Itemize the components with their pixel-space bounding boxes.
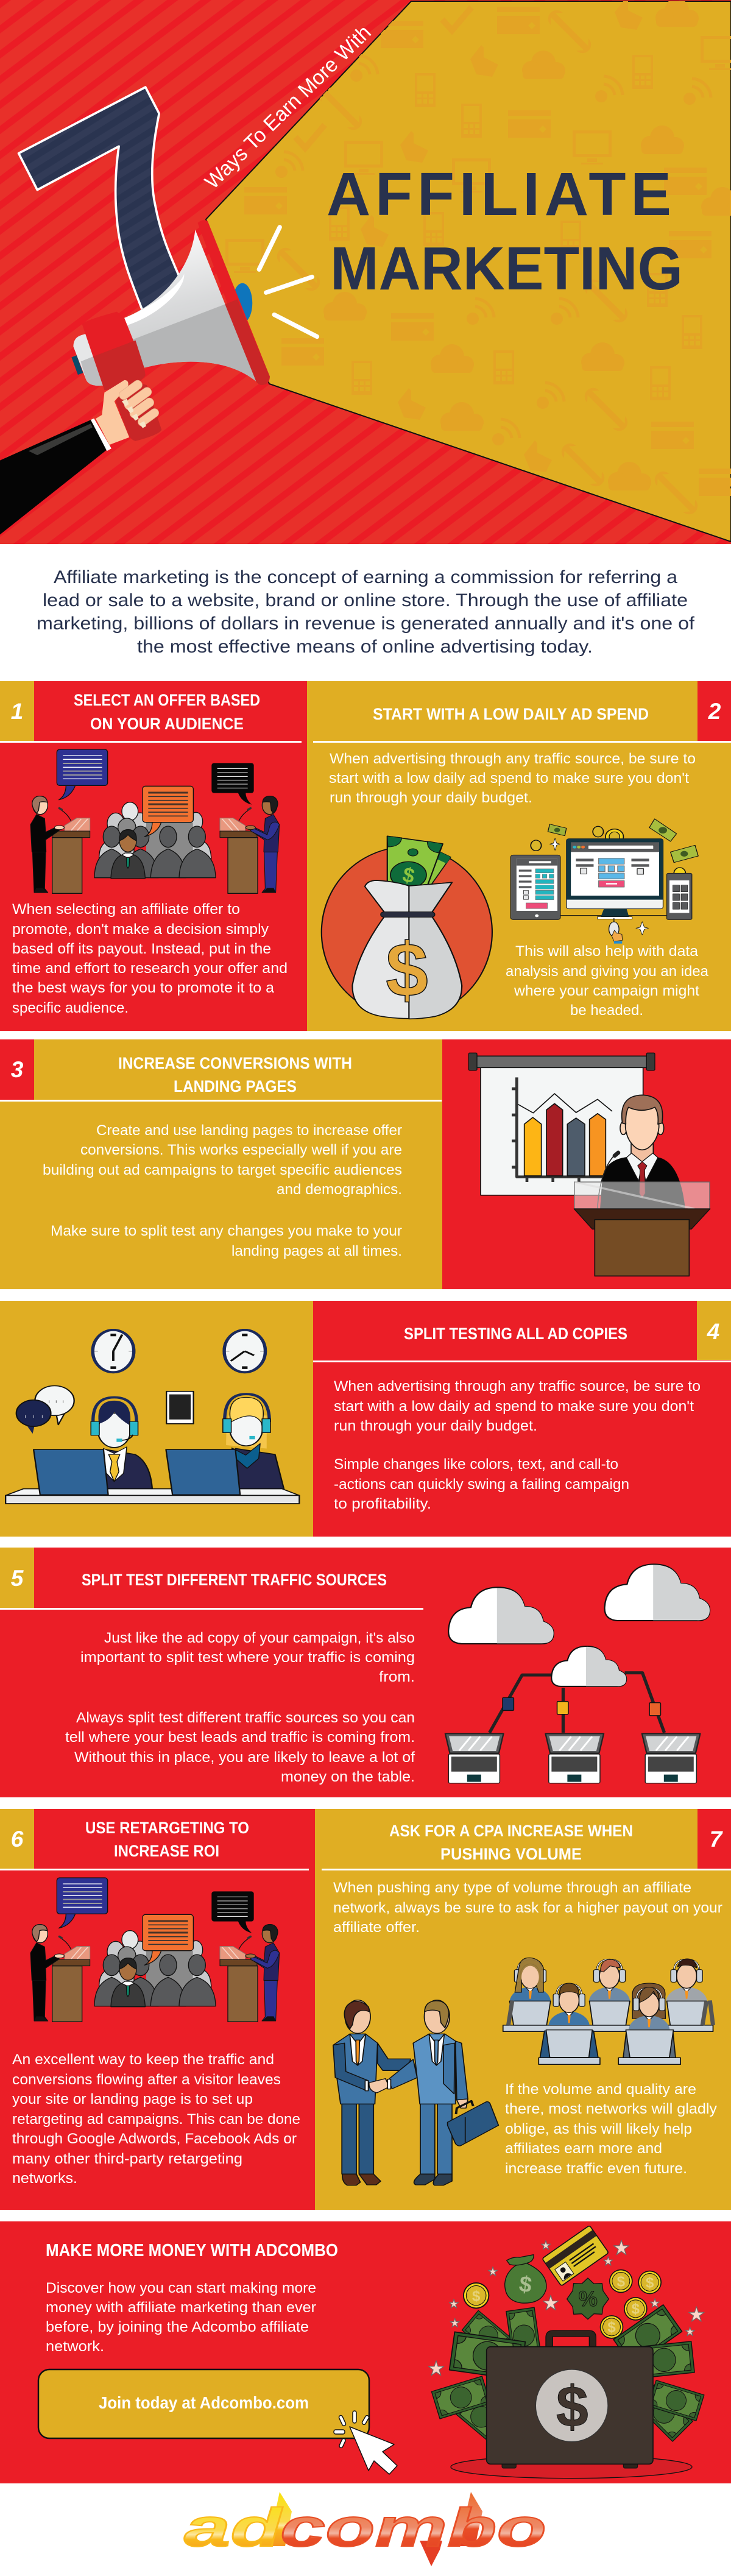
body text: When advertising through any traffic source, be sure to xyxy=(334,1378,701,1395)
body text xyxy=(329,751,696,806)
body text: landing pages at all times. xyxy=(231,1243,402,1259)
body text: run through your daily budget. xyxy=(334,1418,537,1434)
illustration: briefcase full of money: $ xyxy=(518,2271,533,2298)
illustration: call center agents xyxy=(5,1329,299,1504)
number badge 6 xyxy=(0,1809,34,1869)
body text: based off its payout. Instead, put in the xyxy=(12,941,271,957)
body text: When selecting an affiliate offer to xyxy=(12,901,240,918)
panel: step 5 xyxy=(0,1548,731,1797)
illustration: briefcase full of money xyxy=(428,2225,704,2479)
body text: before, by joining the Adcombo affiliate xyxy=(46,2319,309,2335)
body text xyxy=(12,901,288,1016)
body text: Make sure to split test any changes you make to your xyxy=(51,1223,402,1239)
illustration: briefcase full of money: $ xyxy=(632,2301,640,2318)
body text: Just like the ad copy of your campaign, it's also xyxy=(104,1630,415,1646)
illustration: team of agents at laptops xyxy=(503,1958,713,2064)
body text: Always split test different traffic sources so you can xyxy=(76,1710,415,1726)
illustration: briefcase full of money: $ xyxy=(472,2288,480,2304)
heading xyxy=(74,691,260,733)
body text xyxy=(334,1378,701,1512)
intro paragraph: marketing, billions of dollars in revenue is generated annually and it's one of xyxy=(37,614,695,634)
illustration: briefcase full of money: $ xyxy=(617,2273,625,2290)
background icon pattern xyxy=(225,0,731,518)
number badge 1 xyxy=(0,681,34,741)
panel: step 6 xyxy=(0,1809,315,2210)
illustration: briefcase full of money: $ xyxy=(646,2274,654,2291)
body text: money on the table. xyxy=(281,1769,415,1785)
body text xyxy=(12,2051,300,2187)
body text: When advertising through any traffic source, be sure to xyxy=(330,751,696,767)
body text: run through your daily budget. xyxy=(330,790,532,806)
body text: network. xyxy=(46,2338,104,2355)
body text: to profitability. xyxy=(334,1496,431,1512)
body text xyxy=(46,2280,316,2355)
body text: and demographics. xyxy=(277,1181,402,1198)
illustration: responsive devices with money xyxy=(510,819,698,944)
secondary text: be headed. xyxy=(570,1002,643,1019)
body text xyxy=(333,1880,722,1936)
heading xyxy=(85,1819,249,1860)
number badge 7 xyxy=(697,1809,731,1869)
body text: your site or landing page is to set up xyxy=(12,2091,253,2107)
body text: time and effort to research your offer and xyxy=(12,960,288,977)
number 6: 6 xyxy=(11,1827,24,1852)
secondary text xyxy=(505,2081,717,2177)
heading: INCREASE CONVERSIONS WITH xyxy=(118,1054,352,1072)
body text: When pushing any type of volume through an affiliate xyxy=(333,1880,691,1896)
number badge 4 xyxy=(697,1301,731,1360)
illustration: presenter with chart xyxy=(468,1053,710,1276)
heading: LANDING PAGES xyxy=(174,1077,297,1095)
intro paragraph xyxy=(37,567,695,657)
heading: ON YOUR AUDIENCE xyxy=(90,715,244,733)
number 5: 5 xyxy=(11,1566,24,1591)
heading: START WITH A LOW DAILY AD SPEND xyxy=(373,705,649,723)
logo: adcombo: combo xyxy=(280,2497,546,2558)
body text: through Google Adwords, Facebook Ads or xyxy=(12,2131,297,2147)
body text: networks. xyxy=(12,2170,77,2187)
title line two: MARKETING xyxy=(330,235,683,303)
intro paragraph: Affiliate marketing is the concept of earning a commission for referring a xyxy=(54,567,677,587)
body text: many other third-party retargeting xyxy=(12,2151,242,2167)
body text: start with a low daily ad spend to make sure you don't xyxy=(329,770,689,787)
body text: tell where your best leads and traffic is coming from. xyxy=(65,1729,415,1746)
body text: Simple changes like colors, text, and call-to xyxy=(334,1456,618,1473)
heading: INCREASE ROI xyxy=(114,1842,219,1860)
body text: -actions can quickly swing a failing campaign xyxy=(334,1476,629,1493)
number 3: 3 xyxy=(11,1057,24,1082)
secondary text: there, most networks will gladly xyxy=(505,2101,717,2117)
illustration: briefcase full of money: $ xyxy=(607,2319,616,2336)
striped red background xyxy=(0,0,731,544)
number 1: 1 xyxy=(11,699,23,724)
body text: conversions flowing after a visitor leaves xyxy=(12,2072,281,2088)
secondary text: analysis and giving you an idea xyxy=(506,963,709,980)
button: Join today at Adcombo.com xyxy=(99,2393,309,2412)
intro paragraph: lead or sale to a website, brand or online store. Through the use of affiliate xyxy=(43,590,688,610)
body text xyxy=(65,1630,415,1785)
panel: step 1 xyxy=(0,681,307,1031)
illustration: money bag: $ xyxy=(386,928,428,1013)
panel: step 3 xyxy=(0,1039,731,1289)
heading: ASK FOR A CPA INCREASE WHEN xyxy=(389,1822,633,1840)
body text: the best ways for you to promote it to a xyxy=(12,980,275,996)
number 2: 2 xyxy=(708,699,721,724)
number 7: 7 xyxy=(710,1827,724,1852)
body text: Without this in place, you are likely to leave a lot of xyxy=(74,1749,415,1766)
icon: cursor click xyxy=(334,2411,397,2474)
panel: step 7 xyxy=(315,1809,731,2210)
heading: USE RETARGETING TO xyxy=(85,1819,249,1837)
body text: retargeting ad campaigns. This can be done xyxy=(12,2111,300,2128)
heading: SPLIT TEST DIFFERENT TRAFFIC SOURCES xyxy=(82,1571,387,1589)
secondary text: affiliates earn more and xyxy=(505,2140,662,2157)
body text: Discover how you can start making more xyxy=(46,2280,316,2296)
heading: SPLIT TESTING ALL AD COPIES xyxy=(404,1325,627,1343)
secondary text: increase traffic even future. xyxy=(505,2160,687,2177)
body text: money with affiliate marketing than ever xyxy=(46,2299,316,2316)
logo: adcombo: ad xyxy=(184,2497,283,2558)
heading xyxy=(118,1054,352,1095)
illustration: money bag: $ xyxy=(400,863,417,888)
body text: Create and use landing pages to increase offer xyxy=(96,1122,402,1139)
secondary text: This will also help with data xyxy=(515,943,699,960)
heading: SELECT AN OFFER BASED xyxy=(74,691,260,709)
hero banner xyxy=(0,0,731,544)
illustration: conference speakers and audience xyxy=(30,749,280,893)
illustration: conference speakers and audience xyxy=(30,1878,280,2022)
number badge 3 xyxy=(0,1039,34,1100)
logo: adcombo xyxy=(184,2492,546,2566)
body text: An excellent way to keep the traffic and xyxy=(12,2051,274,2068)
secondary text: If the volume and quality are xyxy=(505,2081,696,2098)
illustration: business handshake xyxy=(333,2000,498,2185)
illustration: money bag xyxy=(322,836,492,1019)
number badge 5 xyxy=(0,1548,34,1608)
body text xyxy=(43,1122,402,1259)
heading xyxy=(389,1822,633,1863)
body text: conversions. This works especially well if you are xyxy=(80,1142,402,1158)
body text: from. xyxy=(379,1669,415,1685)
icon: megaphone held in hand xyxy=(0,220,317,536)
secondary text: where your campaign might xyxy=(514,983,699,999)
number badge 2 xyxy=(697,681,731,741)
body text: promote, don't make a decision simply xyxy=(12,921,269,938)
panel: step 4 xyxy=(0,1301,731,1537)
body text: start with a low daily ad spend to make sure you don't xyxy=(334,1398,694,1415)
body text: specific audience. xyxy=(12,1000,129,1016)
intro paragraph: the most effective means of online advertising today. xyxy=(137,637,593,657)
heading: PUSHING VOLUME xyxy=(440,1845,582,1863)
body text: network, always be sure to ask for a higher payout on your xyxy=(333,1900,722,1916)
button xyxy=(38,2369,369,2438)
body text: important to split test where your traffic is coming xyxy=(80,1649,415,1666)
panel: call to action xyxy=(0,2221,731,2483)
number 4: 4 xyxy=(707,1319,719,1344)
heading: MAKE MORE MONEY WITH ADCOMBO xyxy=(46,2241,338,2260)
numeral seven xyxy=(19,87,181,312)
panel: step 2 xyxy=(307,681,731,1031)
illustration: briefcase full of money: % xyxy=(579,2287,598,2311)
yellow burst panel xyxy=(206,1,731,542)
body text: building out ad campaigns to target specific audiences xyxy=(43,1162,402,1178)
illustration: clouds and laptops network xyxy=(445,1564,710,1783)
body text: affiliate offer. xyxy=(333,1919,420,1936)
title line one: AFFILIATE xyxy=(327,160,671,228)
secondary text xyxy=(506,943,709,1019)
secondary text: oblige, as this will likely help xyxy=(505,2121,692,2137)
subtitle: Ways To Earn More With xyxy=(200,21,376,194)
illustration: briefcase full of money: $ xyxy=(556,2375,588,2440)
